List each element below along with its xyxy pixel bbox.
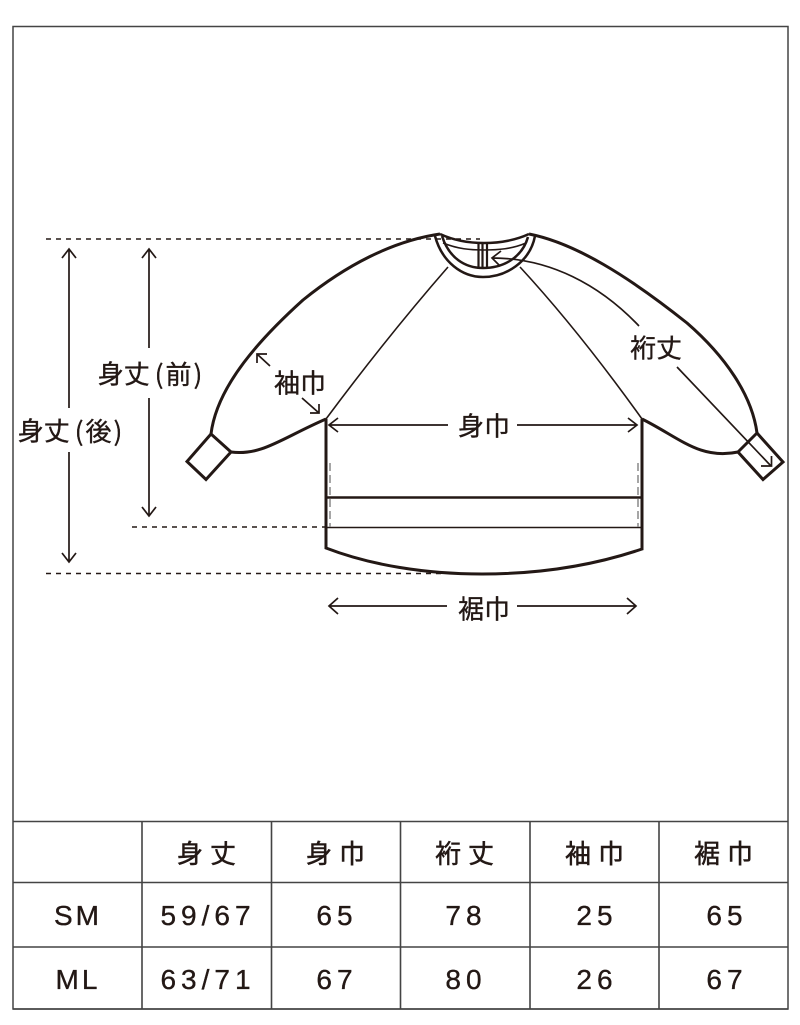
garment diagram [46, 234, 783, 574]
table row SM: 59/67 [160, 900, 256, 931]
back placket [478, 243, 487, 269]
table row ML: 67 [706, 964, 748, 995]
left sleeve [211, 234, 448, 453]
size table [13, 822, 788, 1009]
table row SM: 65 [706, 900, 748, 931]
table header row: 裾巾 [694, 834, 760, 871]
table grid [13, 822, 788, 1009]
dimension: body length back [18, 249, 122, 562]
table row SM: 25 [576, 900, 618, 931]
right cuff [738, 433, 783, 480]
table header row: 袖巾 [565, 834, 631, 871]
table row ML: ML [56, 964, 100, 995]
table row ML: 80 [445, 964, 487, 995]
table header row: 裄丈 [435, 834, 501, 871]
table row SM: 65 [316, 900, 358, 931]
label: hem width: 裾巾 [458, 590, 510, 626]
right sleeve [520, 234, 757, 454]
label: back length: 身丈(後) [18, 412, 122, 448]
table row ML: 63/71 [160, 964, 256, 995]
label: sleeve width: 袖巾 [274, 364, 326, 400]
table row ML [56, 964, 748, 995]
table header row [177, 834, 760, 871]
dotted guide lines [46, 239, 480, 574]
body [326, 419, 642, 574]
left cuff [187, 434, 231, 480]
label: front length: 身丈(前) [98, 354, 202, 392]
table row SM: 78 [445, 900, 487, 931]
table row SM: SM [54, 900, 102, 931]
table row ML: 67 [316, 964, 358, 995]
collar [435, 234, 535, 277]
dimension: sleeve length [492, 251, 772, 466]
table header row: 身丈 [177, 834, 243, 871]
table row ML: 26 [576, 964, 618, 995]
dimension: body length front [98, 249, 202, 516]
dimension: hem width [329, 590, 636, 626]
table row SM [54, 900, 748, 931]
dimension: sleeve width [257, 354, 326, 413]
dimension: body width [329, 406, 637, 444]
label: body width: 身巾 [458, 406, 510, 444]
table header row: 身巾 [306, 834, 372, 871]
label: sleeve length: 裄丈 [630, 328, 682, 366]
